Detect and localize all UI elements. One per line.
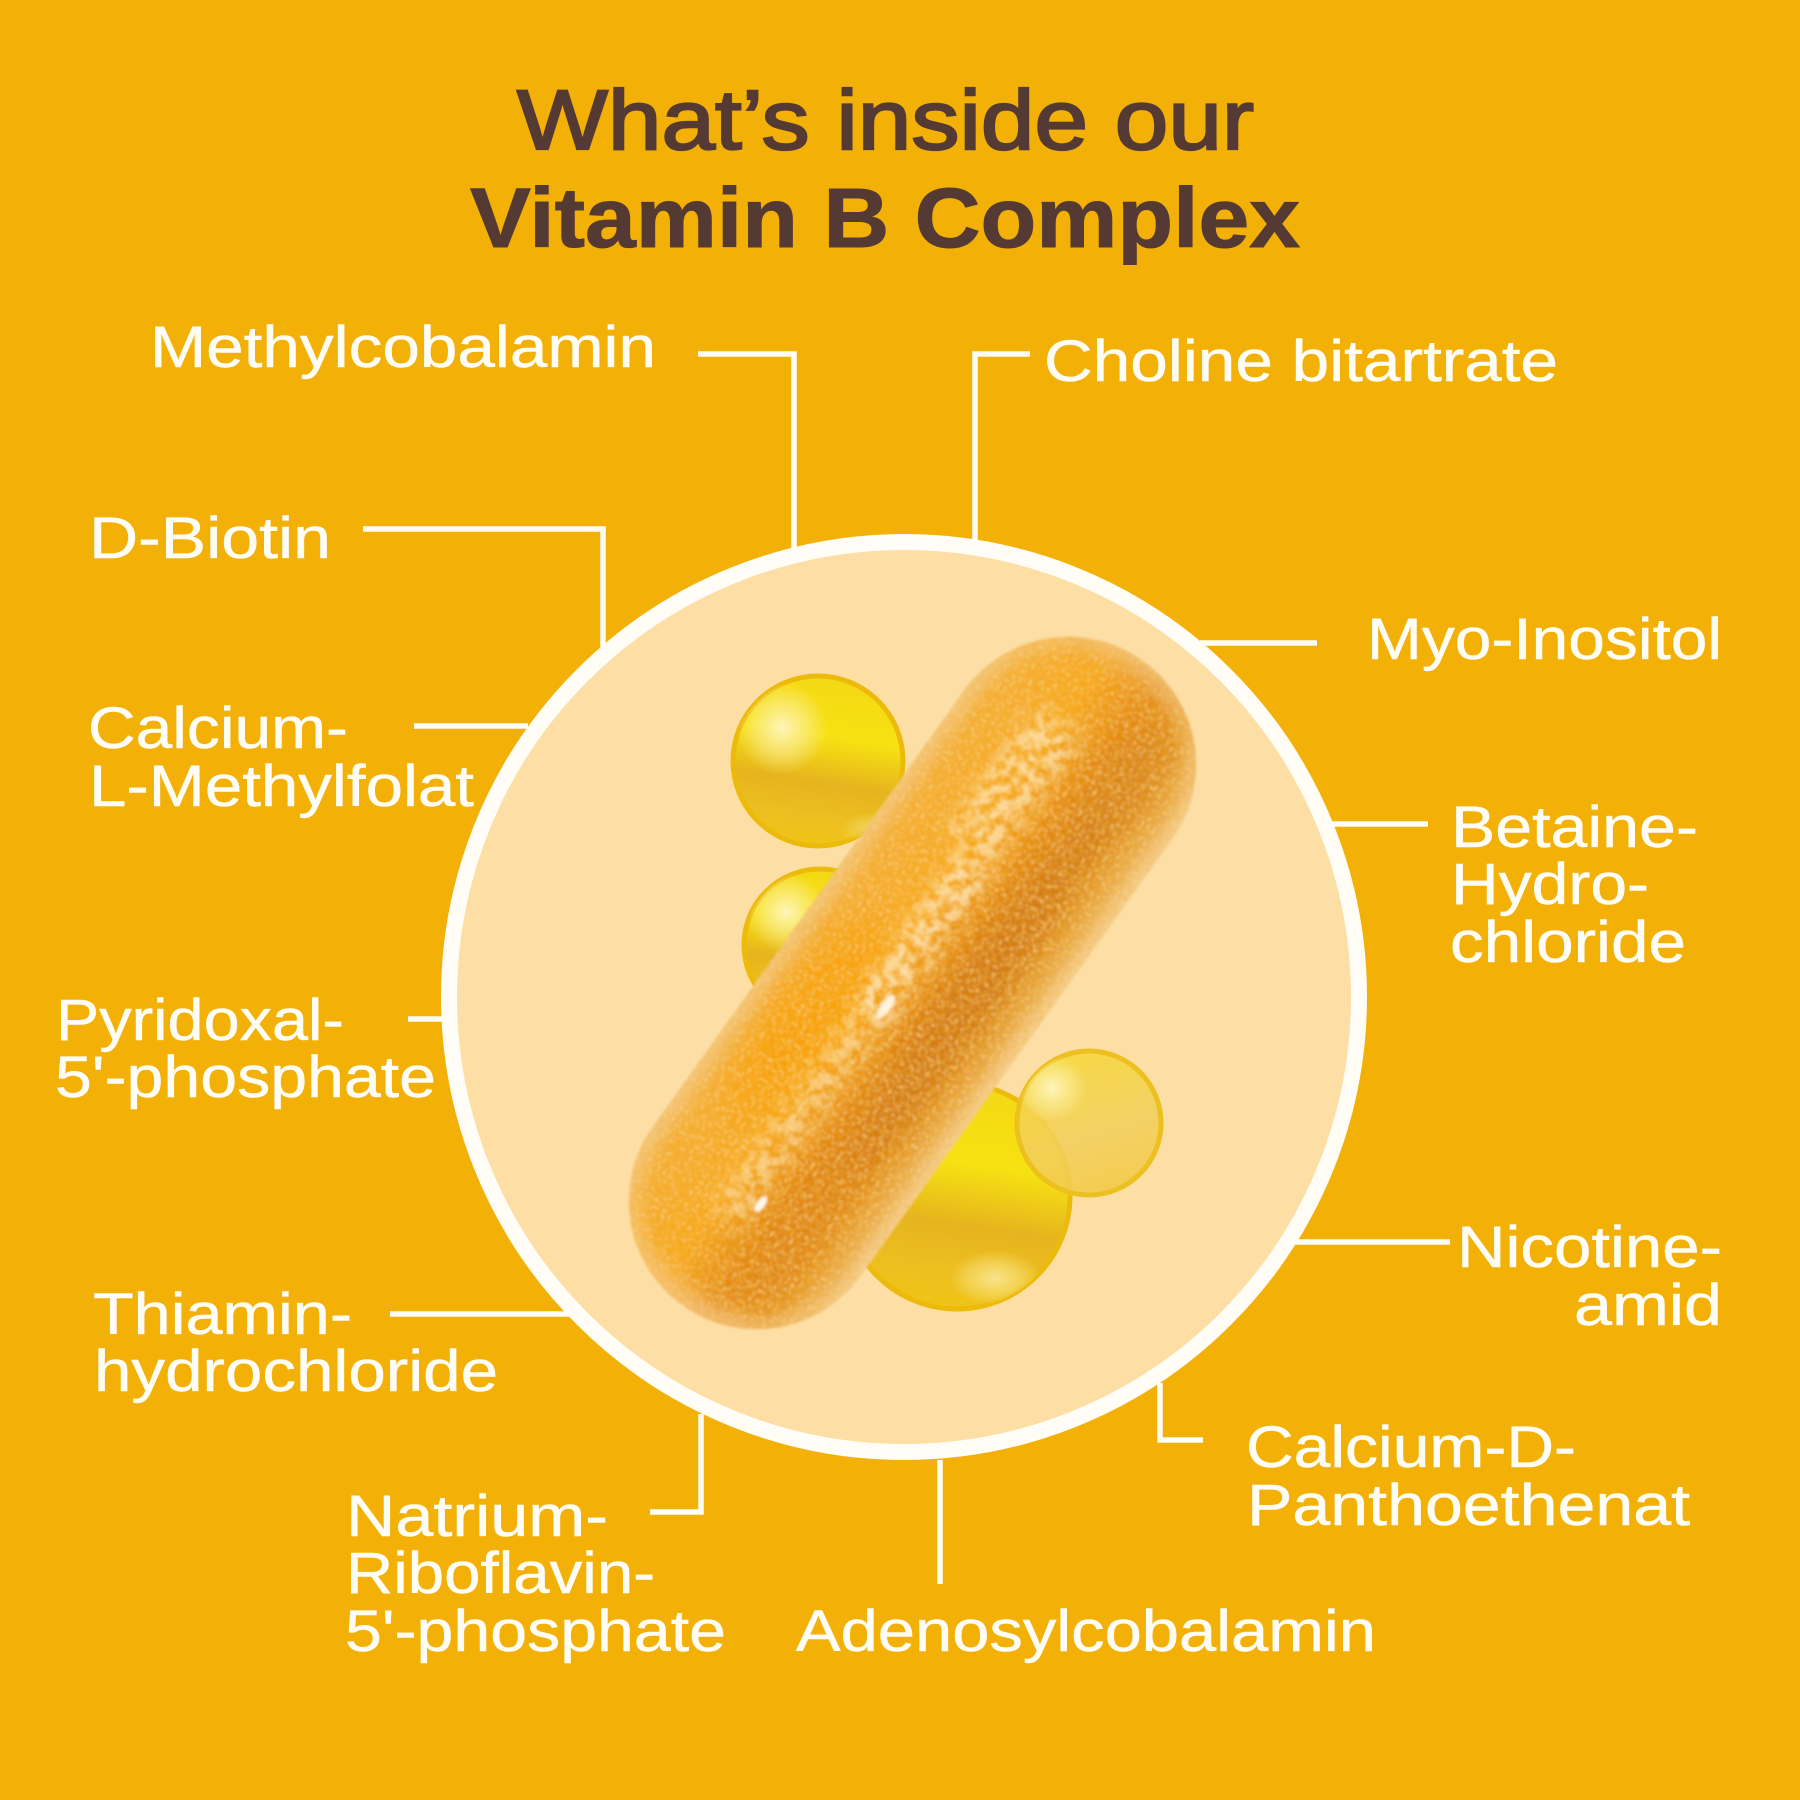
callout: Thiamin-hydrochloride: hydrochloride	[94, 1339, 498, 1404]
callout: Methylcobalamin	[150, 315, 794, 549]
callout: Calcium-D-Panthoethenat: Calcium-D-	[1246, 1415, 1576, 1480]
callout: Nicotineamid: amid	[1574, 1273, 1722, 1338]
callout: Natrium-Riboflavin-5'-phosphate: Natrium-	[346, 1484, 608, 1549]
callout: Natrium-Riboflavin-5'-phosphate: 5'-phosphate	[345, 1599, 726, 1664]
title: What’s inside our	[517, 73, 1254, 167]
callout: Pyridoxal-5'-phosphate: 5'-phosphate	[55, 1045, 436, 1110]
callout: D-Biotin: D-Biotin	[89, 506, 331, 571]
callout: D-Biotin	[89, 506, 603, 654]
callout: Nicotineamid	[1295, 1215, 1722, 1338]
callout: Pyridoxal-5'-phosphate	[55, 988, 443, 1110]
callout: Adenosylcobalamin: Adenosylcobalamin	[796, 1599, 1376, 1664]
callout: Nicotineamid: Nicotine-	[1457, 1215, 1722, 1280]
icon: oil bubble translucent	[1016, 1051, 1161, 1195]
callout: Pyridoxal-5'-phosphate: Pyridoxal-	[56, 988, 344, 1053]
callout: Calcium-D-Panthoethenat	[1160, 1383, 1690, 1538]
callout: Betaine-Hydrochloride: Betaine-	[1451, 795, 1698, 860]
callout: Thiamin-hydrochloride: Thiamin-	[93, 1282, 352, 1347]
callout: Natrium-Riboflavin-5'-phosphate	[345, 1414, 726, 1664]
callout: Betaine-Hydrochloride: Hydro-	[1451, 852, 1649, 917]
callout: Calcium-L-Methylfolat	[88, 696, 528, 819]
callout: Calcium-L-Methylfolat: L-Methylfolat	[89, 754, 474, 819]
callout: Betaine-Hydrochloride	[1332, 795, 1698, 975]
callout: Myo-Inositol: Myo-Inositol	[1367, 607, 1722, 672]
callout: Calcium-D-Panthoethenat: Panthoethenat	[1247, 1473, 1690, 1538]
icon: oil bubble large	[844, 1083, 1070, 1309]
icon: capsule	[628, 635, 1198, 1331]
central circle panel	[449, 542, 1359, 1452]
callout: Betaine-Hydrochloride: chloride	[1450, 910, 1686, 975]
icon: oil bubble middle	[742, 866, 839, 988]
callout: Methylcobalamin: Methylcobalamin	[150, 315, 656, 380]
callout: Thiamin-hydrochloride	[93, 1282, 570, 1404]
callout: Natrium-Riboflavin-5'-phosphate: Riboflavin-	[346, 1541, 655, 1606]
icon: oil bubble upper	[733, 676, 903, 848]
title	[470, 73, 1300, 265]
callout: Choline bitartrate: Choline bitartrate	[1044, 329, 1558, 394]
callout: Choline bitartrate	[975, 329, 1558, 540]
callout: Calcium-L-Methylfolat: Calcium-	[88, 696, 348, 761]
title: Vitamin B Complex	[470, 171, 1300, 265]
